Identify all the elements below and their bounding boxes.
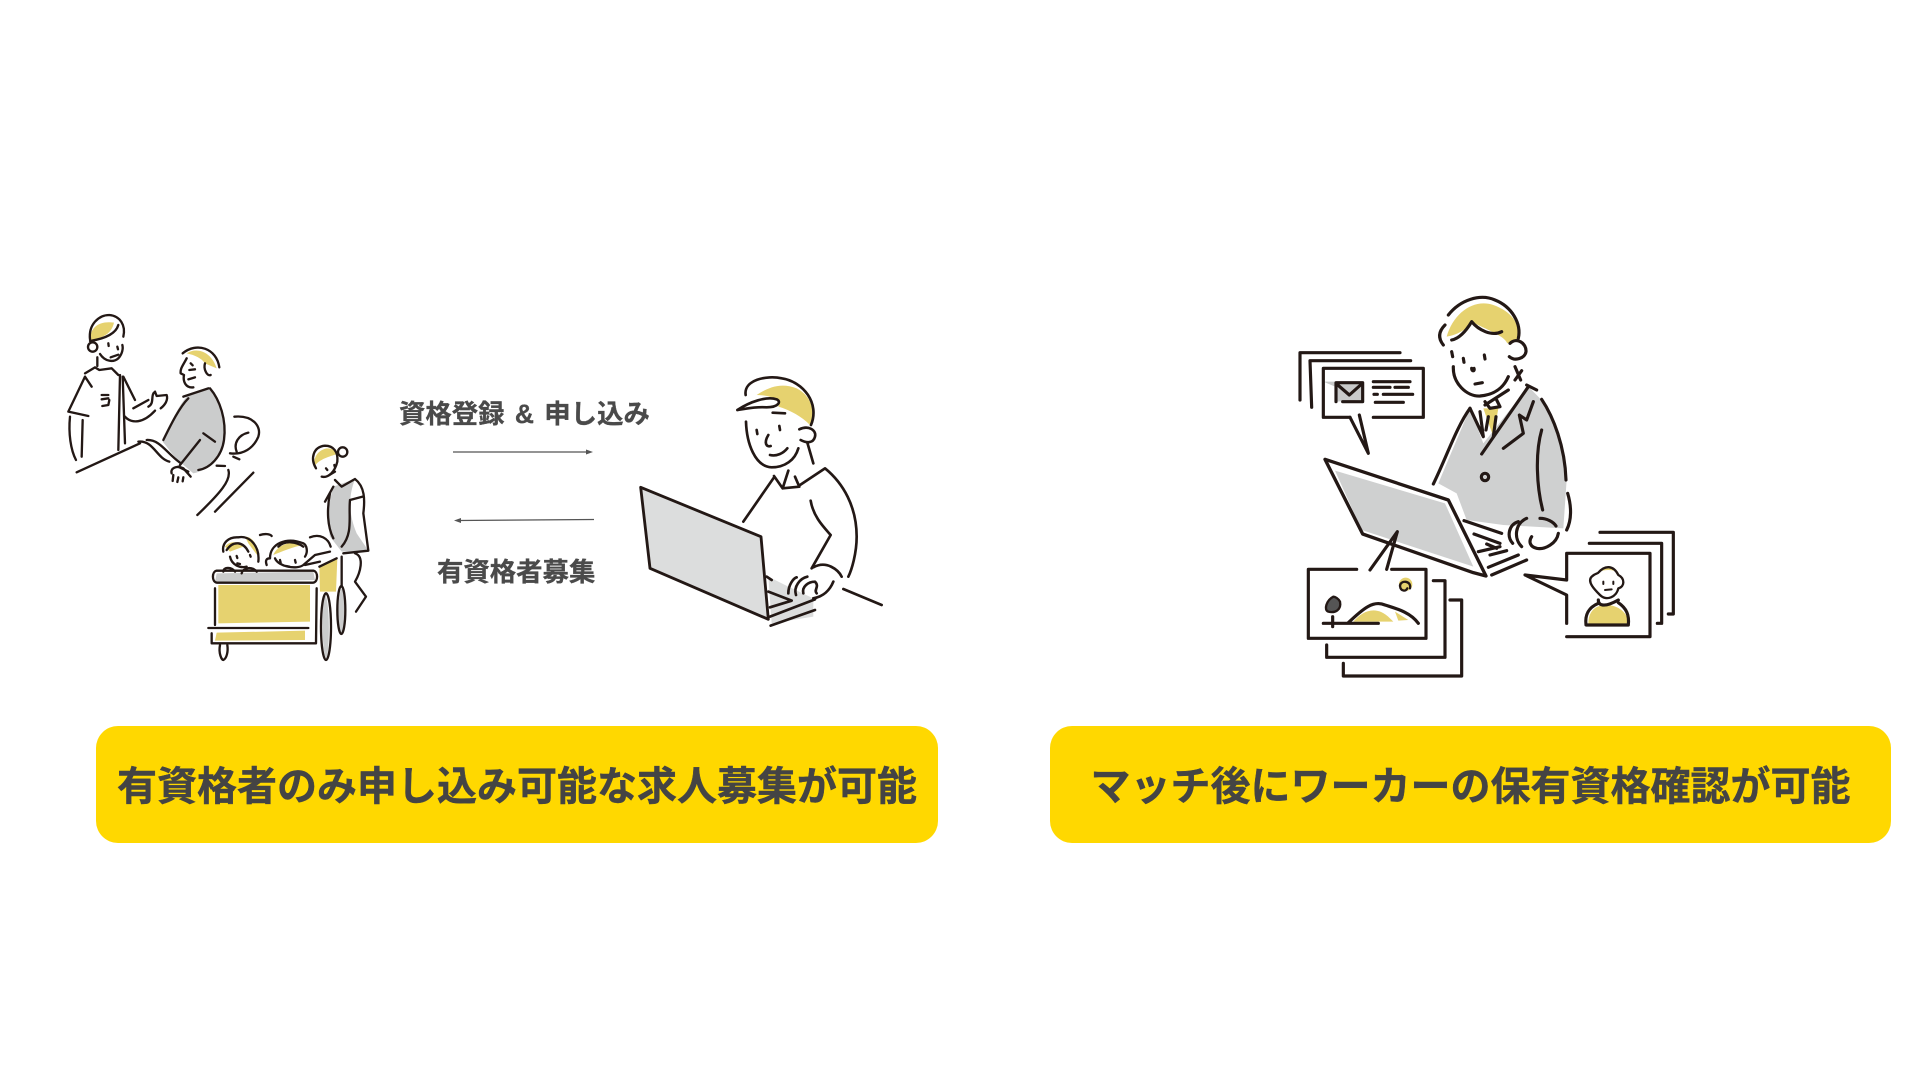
illustration: businessman with documents: [1298, 296, 1675, 678]
suit: [1470, 385, 1537, 454]
label: qualified recruitment: 有資格者募集: [437, 557, 595, 587]
laptop: [1325, 459, 1486, 576]
patient: [183, 348, 219, 375]
arrow: right: [453, 450, 593, 454]
children: [223, 537, 259, 562]
hair fill: [757, 386, 813, 425]
head: [1448, 297, 1519, 338]
laptop screen: [641, 487, 768, 619]
image bubble: [1308, 569, 1426, 638]
arrow: left: [454, 518, 594, 523]
caregiver: [313, 446, 337, 477]
banner: right: マッチ後にワーカーの保有資格確認が可能: [1090, 764, 1850, 808]
fills: [90, 322, 337, 641]
label: registration and application: 資格登録 & 申し込み: [399, 399, 650, 429]
bed: [77, 443, 140, 472]
illustration: care workers with patient and children: [67, 314, 370, 662]
mail bubble: [1300, 353, 1411, 407]
cart: [213, 571, 317, 583]
person bubble: [1525, 553, 1650, 637]
nurse: [90, 315, 124, 339]
banner: right: [1050, 726, 1891, 843]
illustration: worker at laptop: [639, 376, 883, 627]
banner: left: 有資格者のみ申し込み可能な求人募集が可能: [117, 764, 917, 808]
banner: left: [96, 726, 938, 843]
hand: [1509, 518, 1558, 549]
fills: [1447, 303, 1519, 343]
